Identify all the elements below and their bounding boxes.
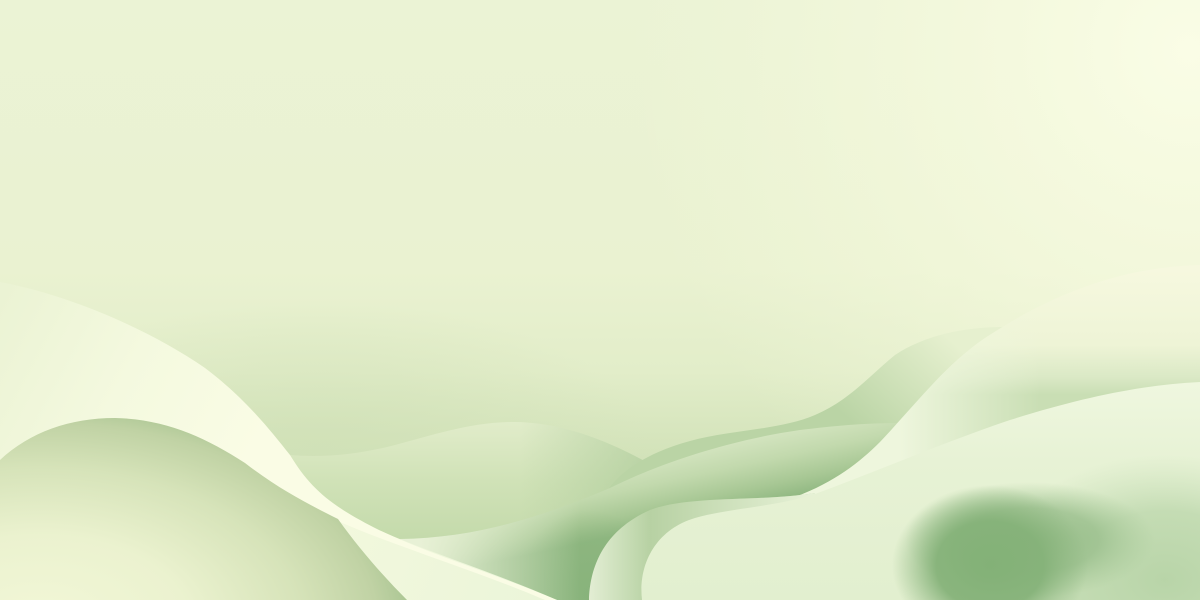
dark left hill	[0, 418, 407, 600]
back hill centre	[290, 422, 660, 600]
right upper wave	[780, 265, 1200, 600]
layer between waves	[589, 493, 815, 600]
middle wave	[400, 423, 899, 600]
back wave right	[600, 327, 1100, 600]
cream strip lower left	[330, 505, 557, 600]
front right wave	[641, 382, 1200, 600]
dark green blurred patch	[896, 472, 1200, 600]
cream left wave	[0, 282, 557, 600]
